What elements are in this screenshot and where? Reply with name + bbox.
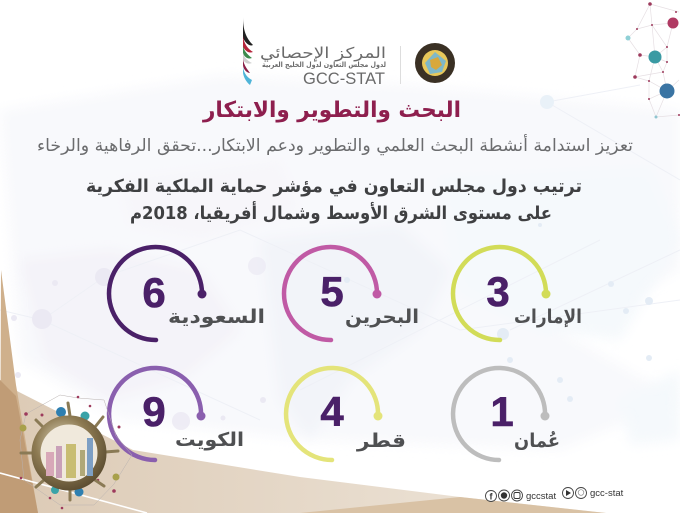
icon: ship wheel with skyline [20, 395, 132, 509]
network decoration top right [540, 2, 680, 119]
logo: GCC-STAT [243, 17, 455, 88]
heading: ترتيب دول مجلس التعاون في مؤشر حماية الملكية الفكرية [86, 176, 582, 197]
rank: Kuwait 9 [109, 368, 244, 460]
rank: Qatar 4: 4 [320, 388, 344, 435]
rank: Saudi Arabia 6: 6 [142, 269, 166, 316]
rank: Oman 1: عُمان [514, 430, 560, 452]
rank: Oman 1 [453, 368, 560, 460]
tan corner shapes [0, 270, 606, 513]
social media handles: gccstat [526, 491, 556, 502]
rank: Bahrain 5 [284, 247, 419, 340]
social media handles: gcc-stat [590, 488, 624, 499]
rank: UAE 3: 3 [486, 268, 510, 315]
logo: GCC-STAT: GCC-STAT [303, 69, 385, 88]
icon: GCC emblem [415, 43, 455, 83]
rank: Bahrain 5: البحرين [345, 306, 419, 328]
rank: UAE 3 [453, 247, 582, 340]
social media handles: f [490, 492, 494, 502]
logo: GCC-STAT: المركز الإحصائي [260, 44, 386, 63]
icon: ribbon [243, 17, 253, 85]
heading [86, 176, 582, 224]
subtitle: تعزيز استدامة أنشطة البحث العلمي والتطوير ودعم الابتكار...تحقق الرفاهية والرخاء [37, 134, 633, 156]
rank: Kuwait 9: الكويت [175, 429, 244, 451]
rank: Saudi Arabia 6: السعودية [168, 306, 265, 328]
rank: Bahrain 5: 5 [320, 268, 344, 315]
title: البحث والتطوير والابتكار [202, 98, 461, 123]
rank: Saudi Arabia 6 [109, 247, 265, 340]
rank: Qatar 4: قطر [356, 430, 406, 452]
logo: GCC-STAT: لدول مجلس التعاون لدول الخليج العربية [262, 61, 386, 69]
rank: UAE 3: الإمارات [514, 306, 582, 328]
social media handles [486, 488, 624, 502]
rank: Oman 1: 1 [490, 388, 514, 435]
heading: على مستوى الشرق الأوسط وشمال أفريقيا، 2018م [130, 201, 552, 224]
rank: Kuwait 9: 9 [142, 388, 166, 435]
rank: Qatar 4 [286, 368, 406, 460]
